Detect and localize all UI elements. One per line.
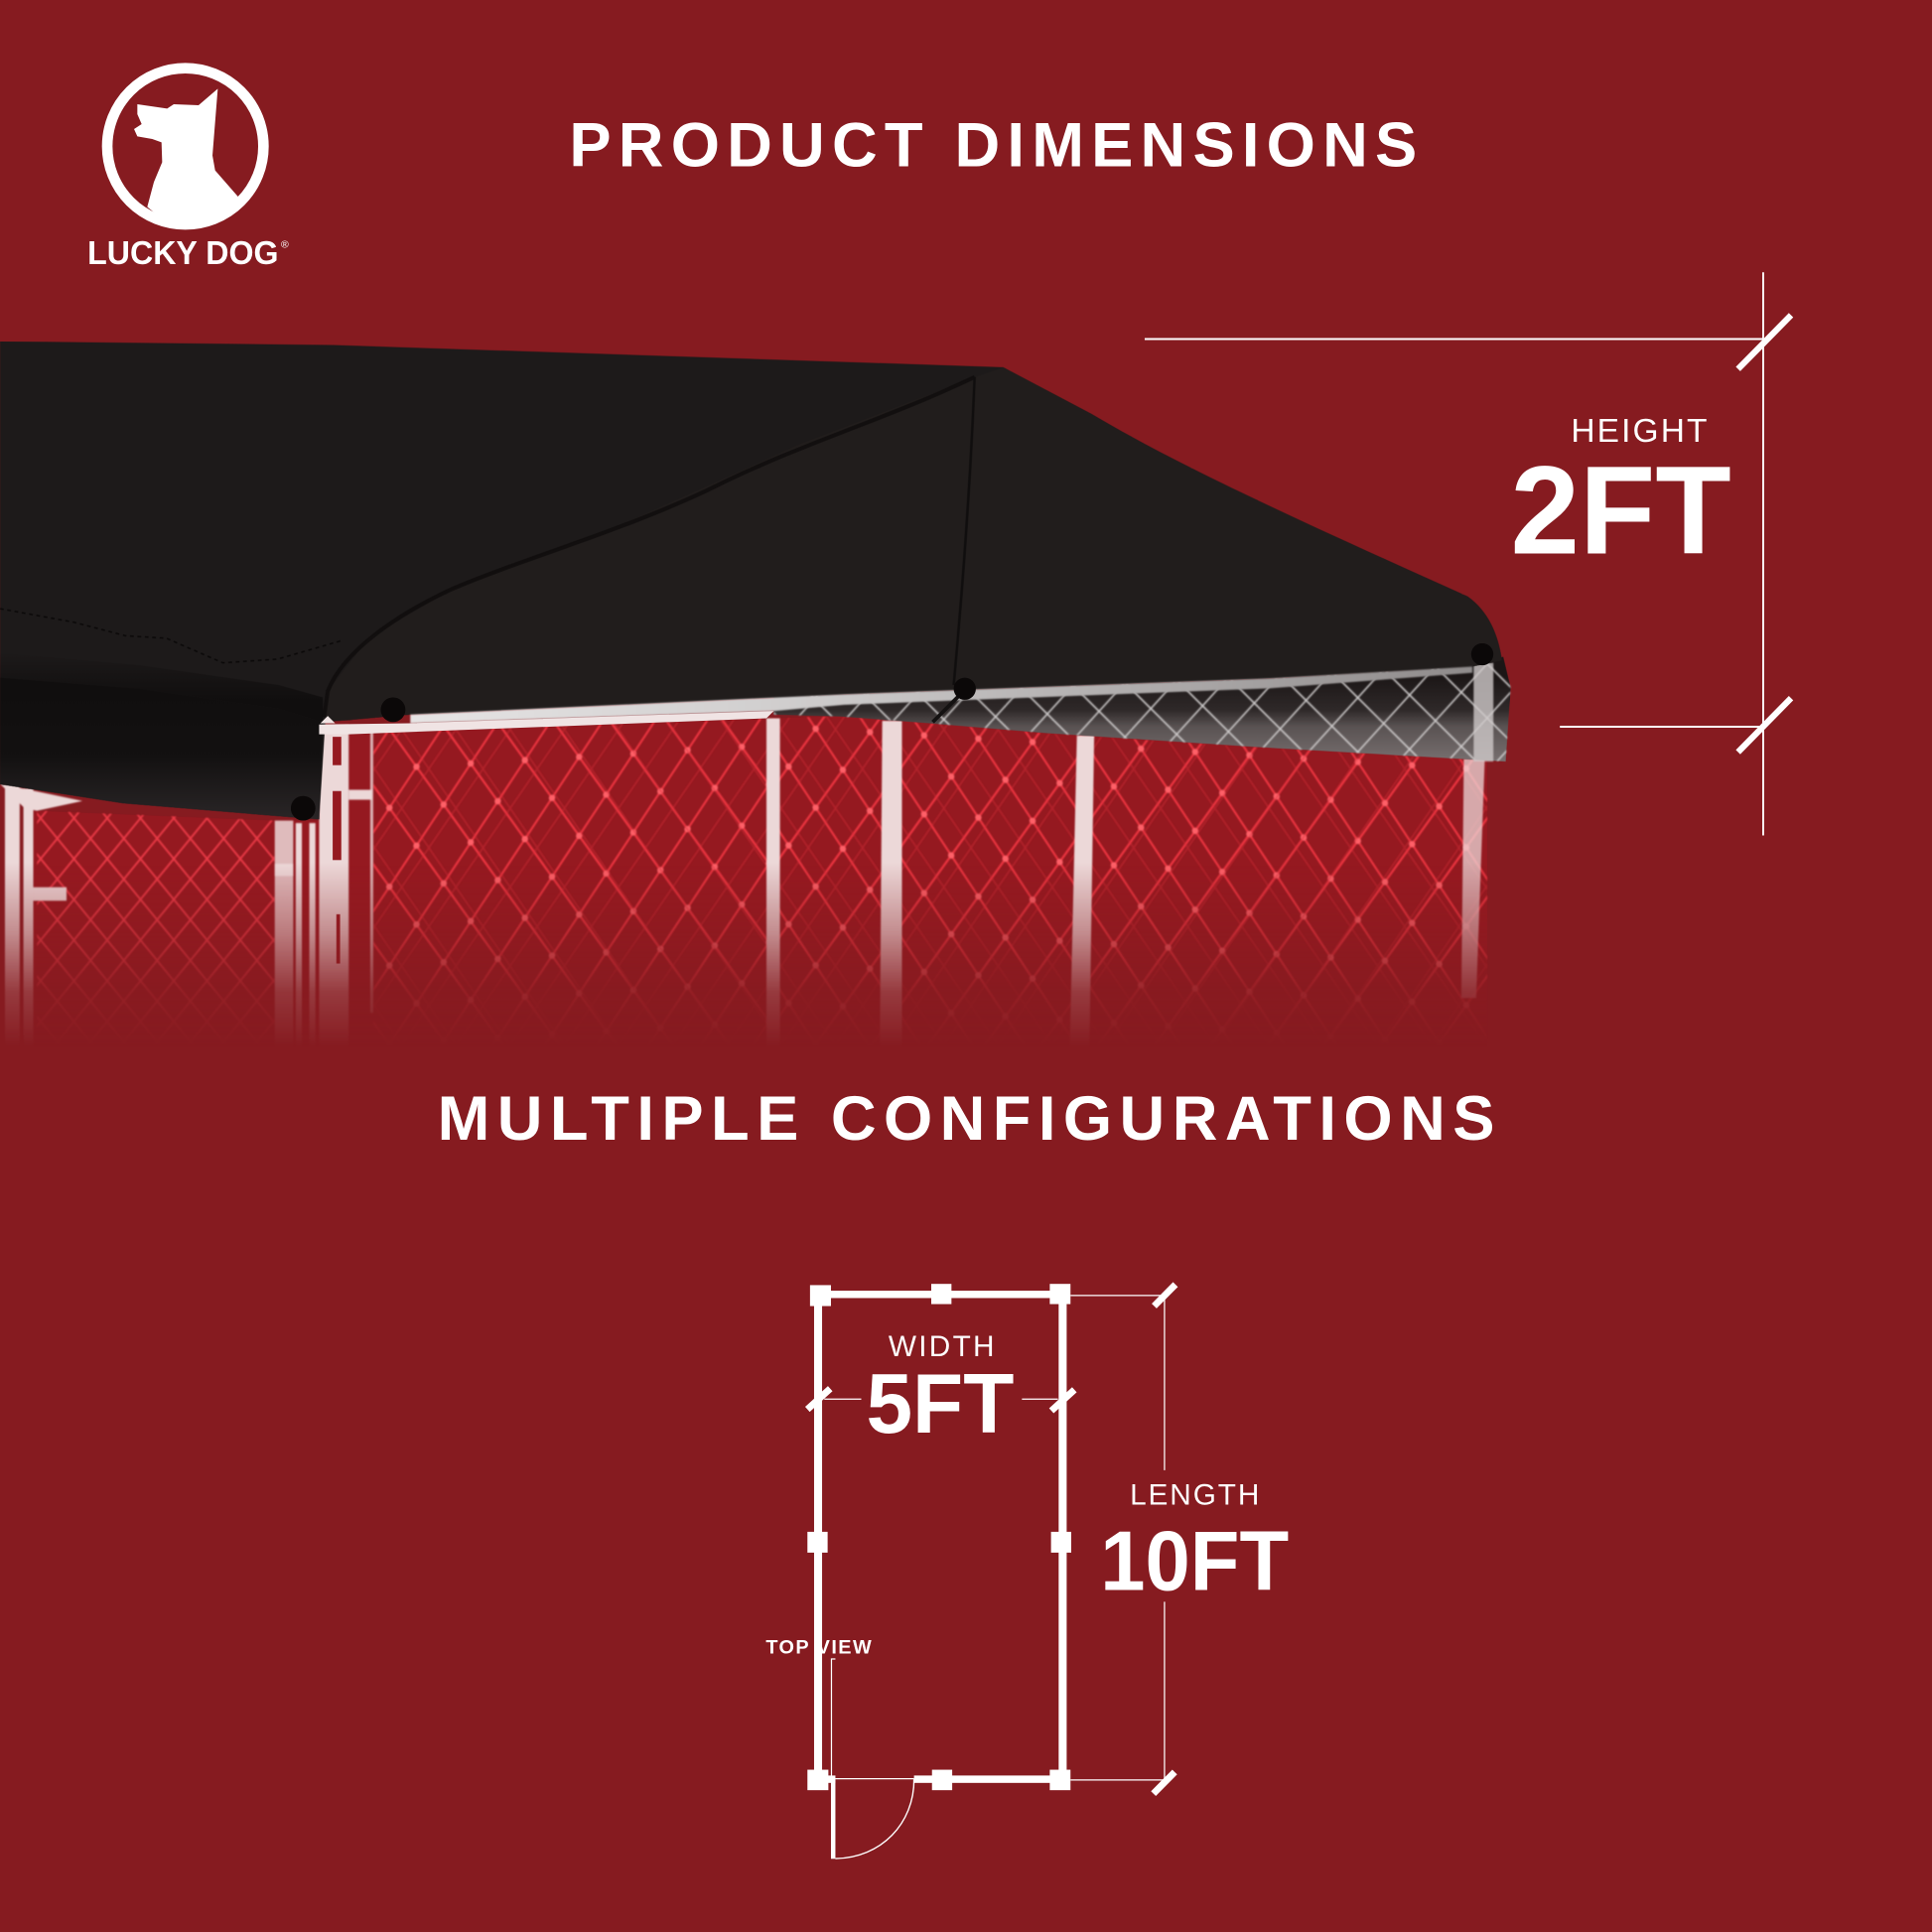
fence panels	[349, 717, 1487, 951]
canopy ridge seams	[0, 377, 975, 717]
canopy	[0, 342, 1502, 821]
fence mesh	[36, 716, 1488, 1021]
canopy silhouette	[0, 342, 1502, 819]
height label: HEIGHT	[1571, 413, 1708, 450]
length value: 10FT	[1100, 1513, 1289, 1608]
kennel walls	[814, 1290, 1066, 1783]
post gaps	[333, 737, 342, 964]
width label: WIDTH	[889, 1330, 995, 1363]
canopy tie straps	[932, 690, 965, 722]
width value: 5FT	[866, 1356, 1014, 1451]
canopy front facet	[324, 367, 1502, 722]
fence top rail	[410, 666, 1472, 724]
fence posts	[0, 719, 1484, 1059]
canopy side flap	[0, 678, 323, 819]
kennel photo	[0, 342, 1511, 1059]
logo ring and dog	[107, 69, 263, 224]
red fence, fading down	[0, 716, 1487, 1059]
canopy tie knobs	[291, 643, 1493, 821]
height value: 2FT	[1511, 440, 1731, 581]
title: multiple configurations: MULTIPLE CONFIGURATIONS	[438, 1084, 1494, 1154]
width dimension lines	[807, 1389, 1074, 1411]
registered mark: ®	[281, 238, 289, 250]
logo: Lucky Dog	[87, 69, 289, 271]
length dimension lines	[1070, 1285, 1175, 1794]
door	[831, 1659, 914, 1859]
title: product dimensions: PRODUCT DIMENSIONS	[569, 111, 1417, 181]
top view label: TOP VIEW	[765, 1637, 872, 1659]
canopy flap shadow	[0, 653, 323, 722]
logo wordmark: LUCKY DOG	[87, 234, 278, 271]
height dimension lines	[1145, 272, 1791, 835]
kennel posts	[807, 1284, 1071, 1790]
silver mesh band	[773, 656, 1511, 761]
length label: LENGTH	[1130, 1478, 1259, 1511]
white strip under rail	[319, 711, 773, 735]
top view plan diagram	[765, 1284, 1289, 1859]
